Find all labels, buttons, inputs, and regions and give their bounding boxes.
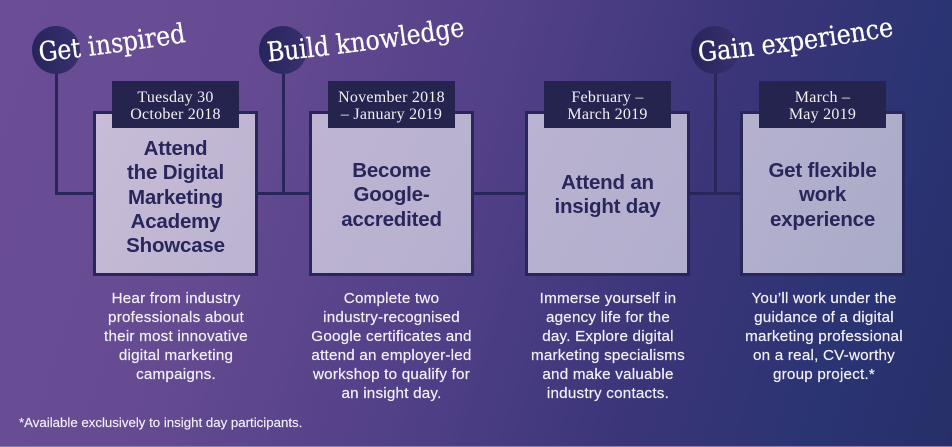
description: step 1: digital marketing — [119, 347, 233, 364]
panel: step 3: insight day — [554, 195, 660, 218]
connector: Build knowledge stem — [282, 72, 285, 194]
heading: Build knowledge: Build knowledge — [267, 20, 464, 62]
description: step 2: an insight day. — [341, 385, 442, 402]
description: step 4: guidance of a digital — [754, 309, 894, 326]
panel: step 3 — [525, 111, 690, 276]
panel: step 1: Showcase — [126, 234, 225, 257]
panel: step 4: Get flexible — [768, 159, 877, 182]
connector: Gain experience stem — [714, 72, 717, 194]
panel: step 2: Google- — [353, 183, 430, 206]
panel: step 3: Attend an — [561, 170, 654, 194]
date tab: step 1: Tuesday 30 — [137, 88, 214, 106]
date tab: step 3 — [544, 81, 671, 128]
date tab: step 2: – January 2019 — [341, 106, 442, 122]
date tab: step 2 — [328, 81, 455, 128]
description: step 3: and make valuable — [542, 366, 674, 383]
heading: Gain experience: Gain experience — [699, 22, 892, 62]
description: step 2: attend an employer-led — [311, 347, 472, 364]
panel: step 1: Academy — [131, 210, 220, 233]
description: step 2: Complete two — [344, 290, 439, 307]
heading: Get inspired: Get inspired — [40, 22, 186, 61]
description: step 3: marketing specialisms — [531, 347, 685, 364]
description: step 2: industry-recognised — [323, 309, 460, 326]
panel: step 4: work — [799, 183, 846, 206]
description: step 4 — [745, 290, 903, 383]
panel: step 4: experience — [770, 208, 875, 231]
panel: step 2 — [309, 111, 474, 276]
connector: Get inspired stem — [55, 72, 58, 194]
panel: step 1 — [93, 111, 258, 276]
description: step 2 — [311, 290, 472, 402]
description: step 3: agency life for the — [546, 309, 670, 326]
description: step 4: group project.* — [773, 366, 875, 383]
connector: horizontal timeline — [55, 192, 855, 195]
description: step 1 — [104, 290, 248, 383]
panel: step 1: Attend — [144, 137, 207, 160]
date tab: step 2: November 2018 — [338, 88, 445, 106]
description: step 2: Google certificates and — [311, 328, 472, 345]
description: step 3 — [531, 290, 685, 402]
description: step 2: workshop to qualify for — [313, 366, 470, 383]
panel: step 2: Become — [352, 159, 431, 182]
description: step 3: day. Explore digital — [542, 328, 674, 345]
panel: step 1: Marketing — [128, 186, 223, 209]
date tab: step 3: March 2019 — [567, 106, 648, 122]
stage headings with circles — [32, 20, 892, 74]
description: step 4: on a real, CV-worthy — [753, 347, 895, 364]
date tab: step 4: May 2019 — [789, 106, 856, 122]
footnote: *Available exclusively to insight day participants. — [19, 415, 302, 430]
date tab: step 1: October 2018 — [130, 106, 221, 122]
date tab: step 3: February – — [571, 88, 644, 106]
description: step 4: marketing professional — [745, 328, 903, 345]
panel: step 4 — [740, 111, 905, 276]
date tab: step 1 — [112, 81, 239, 128]
panel: step 2: accredited — [341, 208, 442, 231]
description: step 1: campaigns. — [136, 366, 216, 383]
description: step 1: professionals about — [108, 309, 244, 326]
description: step 4: You’ll work under the — [751, 290, 897, 307]
date tab: step 4 — [759, 81, 886, 128]
date tab: step 4: March – — [795, 88, 850, 106]
description: step 3: industry contacts. — [547, 385, 669, 402]
panel: step 1: the Digital — [127, 161, 224, 184]
description: step 3: Immerse yourself in — [540, 290, 676, 307]
description: step 1: Hear from industry — [112, 290, 240, 307]
description: step 1: their most innovative — [104, 328, 248, 345]
